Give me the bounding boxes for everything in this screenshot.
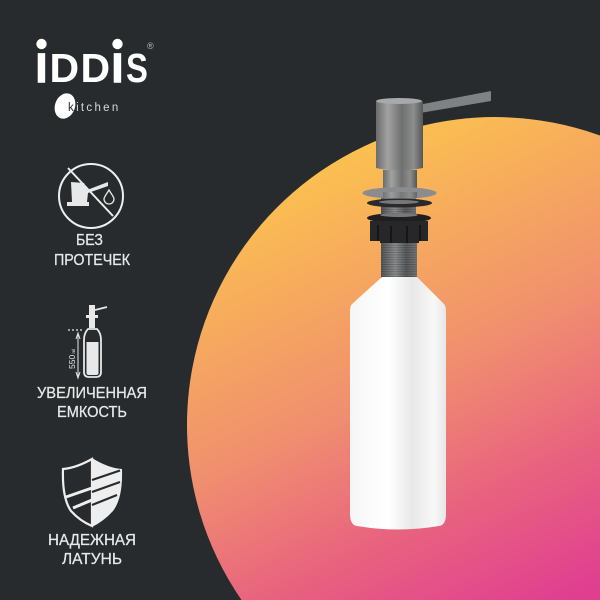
- logo: [36, 39, 154, 122]
- kitchen circle: [51, 90, 79, 122]
- logo wordmark: S: [126, 44, 148, 91]
- logo wordmark: D: [50, 45, 79, 91]
- white bottle: [350, 277, 446, 530]
- label: brass: НАДЕЖНАЯ: [48, 532, 136, 549]
- label: no leaks: БЕЗ: [76, 232, 103, 249]
- gradient circle: [187, 117, 600, 600]
- black ring: [367, 213, 431, 223]
- logo wordmark: I: [112, 45, 123, 91]
- logo wordmark: [36, 39, 148, 91]
- flange: [362, 187, 436, 199]
- pump head: [376, 99, 423, 170]
- icon: capacity bottle: [67, 305, 107, 378]
- neck: [383, 170, 417, 190]
- label: brass: [48, 532, 136, 568]
- registered mark: ®: [147, 41, 154, 51]
- icon: no leaks: [59, 164, 123, 228]
- label: capacity: [37, 385, 147, 421]
- label: capacity: УВЕЛИЧЕННАЯ: [37, 385, 147, 402]
- thread lower: [381, 238, 417, 280]
- black washer: [367, 198, 432, 208]
- label: capacity: ЕМКОСТЬ: [57, 404, 127, 421]
- label: no leaks: [54, 232, 130, 269]
- logo wordmark: D: [80, 45, 110, 91]
- product: dispenser: [350, 91, 491, 530]
- logo wordmark: I: [36, 45, 47, 91]
- label: no leaks: ПРОТЕЧЕК: [54, 252, 130, 269]
- icon: shield: [63, 458, 122, 527]
- black nut: [370, 221, 428, 243]
- thread upper: [381, 196, 416, 224]
- label: brass: ЛАТУНЬ: [62, 551, 122, 568]
- icon: capacity bottle: 550 ml: [67, 349, 77, 369]
- lever handle: [418, 91, 491, 113]
- kitchen label: kitchen: [68, 102, 121, 114]
